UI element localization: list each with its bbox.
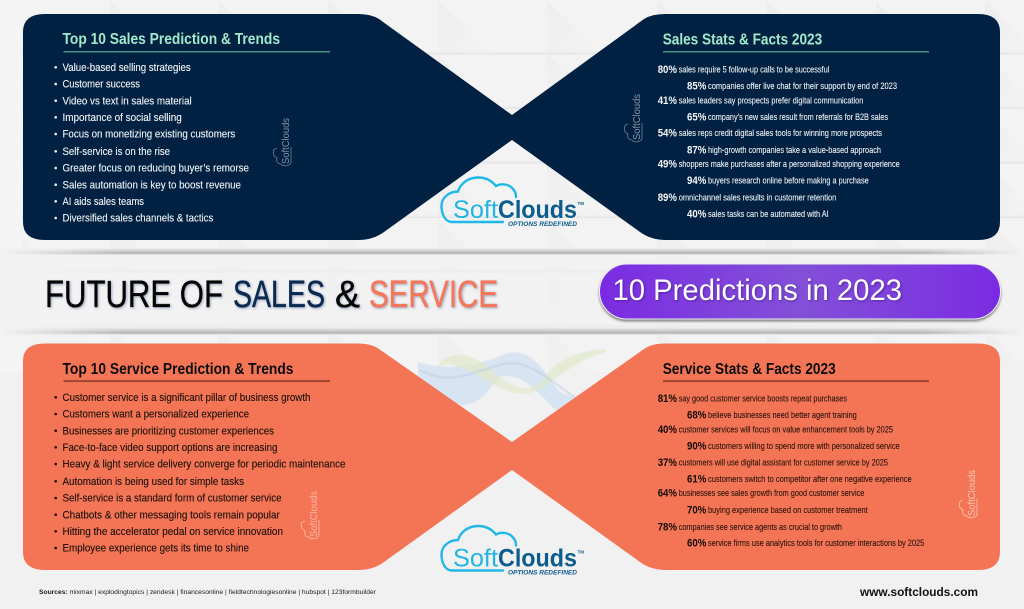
list: service stats: 81% [658, 393, 677, 405]
list: service stats: 40% [658, 424, 677, 436]
list: service stats: service firms use analytics tools for customer interactions by 2025 [708, 538, 924, 548]
watermark: softclouds [273, 118, 292, 166]
badge: 10 predictions in 2023: 10 Predictions in 2023 [612, 274, 902, 307]
list: service stats: 68% [687, 410, 706, 422]
title: SERVICE [369, 274, 498, 316]
watermark: softclouds [301, 491, 320, 539]
list: sales stats: sales leaders say prospects prefer digital communication [679, 96, 863, 106]
watermark: softclouds: SoftClouds [967, 470, 978, 516]
title: FUTURE OF [45, 274, 223, 316]
logo: softclouds bottom: OPTIONS REDEFINED [508, 569, 577, 576]
list: service stats: believe businesses need better agent training [708, 410, 857, 420]
list: sales trends: Importance of social selling [62, 112, 182, 124]
logo: softclouds bottom [442, 526, 584, 576]
logo: softclouds top: OPTIONS REDEFINED [508, 221, 577, 228]
list: service stats: customer services will focus on value enhancement tools by 2025 [679, 424, 893, 434]
title [45, 274, 498, 316]
list: sales trends: Focus on monetizing existing customers [62, 129, 236, 141]
list: sales stats: 85% [687, 81, 706, 93]
logo: softclouds top [442, 178, 584, 228]
list: service stats: customers willing to spend more with personalized service [708, 441, 900, 451]
panel: service stats and facts [512, 344, 1000, 570]
list: sales stats: sales tasks can be automated with AI [708, 209, 829, 219]
list: service trends: Businesses are prioritizing customer experiences [62, 425, 274, 437]
list: sales stats: 89% [658, 192, 677, 204]
list: service stats: 37% [658, 457, 677, 469]
list: service stats: 78% [658, 521, 677, 533]
logo: softclouds bottom: TM [578, 550, 584, 554]
list: sales trends: Video vs text in sales material [62, 95, 192, 107]
list: sales trends: Diversified sales channels & tactics [62, 213, 214, 225]
website url: www.softclouds.com [859, 587, 978, 599]
panel: top 10 sales predictions [23, 14, 512, 240]
heading: service stats: Service Stats & Facts 2023 [663, 361, 836, 378]
watermark: softclouds: SoftClouds [281, 118, 292, 164]
badge: 10 predictions in 2023 [600, 264, 1000, 319]
list: service stats: customers will use digital assistant for customer service by 2025 [679, 458, 888, 468]
heading: top 10 service: Top 10 Service Prediction & Trends [62, 361, 294, 378]
list: sales trends: Self-service is on the rise [62, 146, 170, 158]
list: sales stats: 49% [658, 159, 677, 171]
list: service trends: Customer service is a significant pillar of business growth [62, 392, 310, 404]
list: sales stats: 54% [658, 128, 677, 140]
panel: sales stats and facts [512, 14, 1000, 240]
logo: softclouds bottom: Soft [453, 544, 498, 572]
list: service stats: businesses see sales growth from good customer service [679, 488, 864, 498]
list: service stats: 61% [687, 473, 706, 485]
list: sales trends: Customer success [62, 79, 140, 91]
list: service stats: 64% [658, 488, 677, 500]
list: sales trends: Greater focus on reducing buyer’s remorse [62, 163, 249, 175]
logo: softclouds top: Clouds [498, 196, 577, 224]
list: service stats: 70% [687, 504, 706, 516]
watermark: softclouds [624, 94, 643, 142]
list: sales stats: 80% [658, 64, 677, 76]
title: & [335, 274, 360, 316]
watermark: softclouds: SoftClouds [632, 94, 643, 140]
decorative wave [418, 349, 606, 410]
list: service trends: Heavy & light service delivery converge for periodic maintenance [62, 459, 346, 471]
list: sales stats: high-growth companies take a value-based approach [708, 145, 881, 155]
list: sales stats: companies offer live chat for their support by end of 2023 [708, 81, 897, 91]
list: sales stats: shoppers make purchases after a personalized shopping experience [679, 159, 900, 169]
watermark: softclouds [959, 470, 978, 518]
list: service trends: Hitting the accelerator pedal on service innovation [62, 526, 283, 538]
sources: Sources: mixmax | explodingtopics | zendesk | financesonline | fieldtechnologiesonline | hubspot | 123formbuilder [39, 589, 377, 596]
list: sales stats: 41% [658, 95, 677, 107]
list: sales stats [658, 64, 900, 221]
logo: softclouds top: TM [578, 201, 584, 206]
list: sales stats: 87% [687, 144, 706, 156]
list: sales stats: company’s new sales result from referrals for B2B sales [708, 112, 888, 122]
list: service trends: Customers want a personalized experience [62, 409, 249, 421]
list: sales stats: sales reps credit digital sales tools for winning more prospects [679, 128, 882, 138]
list: service trends: Self-service is a standard form of customer service [62, 493, 282, 505]
heading: top 10 sales: Top 10 Sales Prediction & Trends [62, 31, 280, 48]
list: sales stats: buyers research online before making a purchase [708, 176, 869, 186]
list: service stats: buying experience based on customer treatment [708, 505, 868, 515]
list: sales stats: omnichannel sales results in customer retention [679, 192, 836, 202]
panel: top 10 service predictions [23, 344, 512, 570]
list: service stats [658, 393, 924, 550]
logo: softclouds bottom: Clouds [498, 544, 577, 572]
list: service stats: customers switch to competitor after one negative experience [708, 474, 912, 484]
list: sales stats: sales require 5 follow-up calls to be successful [679, 64, 829, 74]
list: service trends: Employee experience gets its time to shine [62, 543, 249, 555]
list: sales stats: 40% [687, 209, 706, 221]
list: service stats: 90% [687, 441, 706, 453]
heading: sales stats: Sales Stats & Facts 2023 [663, 32, 823, 49]
list: sales trends: Value-based selling strategies [62, 62, 191, 74]
list: service stats: say good customer service boosts repeat purchases [679, 394, 847, 404]
title: SALES [233, 274, 325, 316]
list: sales trends: AI aids sales teams [62, 196, 144, 208]
list: sales stats: 94% [687, 175, 706, 187]
list: sales trends [54, 62, 249, 225]
list: service stats: companies see service agents as crucial to growth [679, 522, 842, 532]
list: sales stats: 65% [687, 111, 706, 123]
list: service trends: Chatbots & other messaging tools remain popular [62, 509, 280, 521]
logo: softclouds top: Soft [453, 196, 498, 224]
list: service trends [54, 392, 346, 555]
list: sales trends: Sales automation is key to boost revenue [62, 179, 241, 191]
list: service trends: Automation is being used for simple tasks [62, 476, 244, 488]
list: service trends: Face-to-face video support options are increasing [62, 442, 278, 454]
list: service stats: 60% [687, 538, 706, 550]
watermark: softclouds: SoftClouds [309, 491, 320, 537]
